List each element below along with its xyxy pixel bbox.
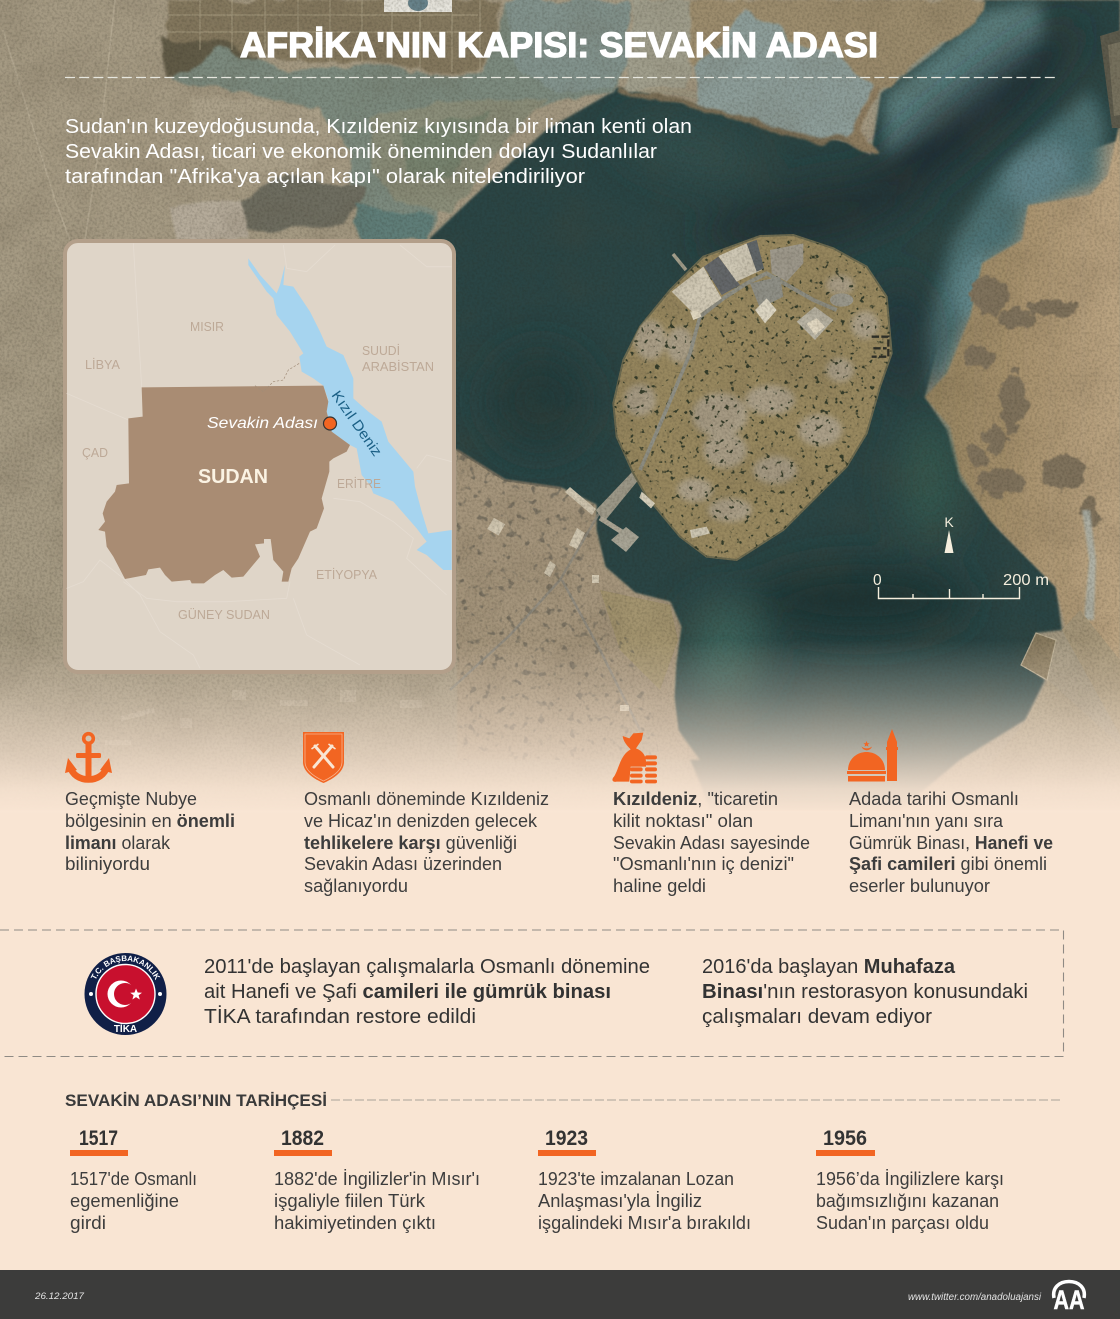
left land tracks (3, 0, 115, 240)
timeline item 1882: işgaliyle fiilen Türk (274, 1191, 426, 1211)
text: restoration right (702, 956, 1028, 1028)
timeline item 1923: 1923'te imzalanan Lozan (538, 1169, 734, 1189)
fade into cream background (0, 640, 1120, 815)
icon: money bag and coins (612, 733, 657, 783)
timeline item 1923: 1923 (545, 1127, 588, 1150)
map labels: SUUDİ (362, 344, 400, 358)
small island in lagoon (371, 97, 546, 213)
pale flats (170, 200, 250, 240)
salt ponds (384, 0, 452, 12)
icon: anchor (65, 734, 112, 780)
shoreline salt flat (1082, 510, 1096, 620)
timeline item 1923 (538, 1127, 751, 1233)
intro text: tarafından "Afrika'ya açılan kapı" olarak nitelendiriliyor (65, 165, 585, 188)
text: column 4: Gümrük Binası, Hanefi ve (849, 833, 1053, 853)
text: column 3: Kızıldeniz, "ticaretin (613, 789, 778, 809)
timeline item 1923: Anlaşması'yla İngiliz (538, 1191, 702, 1211)
map labels (82, 320, 434, 622)
text: column 1 (65, 789, 235, 874)
timeline item 1517: egemenliğine (70, 1191, 179, 1211)
timeline item 1517: girdi (70, 1213, 106, 1233)
intro text: Sudan'ın kuzeydoğusunda, Kızıldeniz kıyısında bir liman kenti olan (65, 115, 692, 138)
text: restoration left: 2011'de başlayan çalışmalarla Osmanlı dönemine (204, 956, 650, 978)
text: restoration left (204, 956, 650, 1028)
timeline item 1956: Sudan'ın parçası oldu (816, 1213, 989, 1233)
text: restoration right: çalışmaları devam ediyor (702, 1006, 932, 1028)
east coast land (925, 122, 1120, 670)
spit (846, 88, 881, 157)
text: column 2: sağlanıyordu (304, 876, 408, 896)
text: column 2: tehlikelere karşı güvenliği (304, 833, 517, 853)
location marker (324, 417, 336, 430)
intro text (65, 115, 692, 188)
map labels: LİBYA (85, 358, 121, 372)
Sudan (98, 386, 350, 583)
northeast structure (1100, 30, 1120, 128)
east land dark patches (967, 275, 1098, 524)
Red Sea label: Kızıl Deniz (328, 388, 384, 460)
island buildings and roads (639, 240, 888, 538)
date: 26.12.2017 (34, 1291, 85, 1302)
text: column 2: Osmanlı döneminde Kızıldeniz (304, 789, 549, 809)
text: column 1: Geçmişte Nubye (65, 789, 197, 809)
deep water (430, 0, 1120, 810)
text: column 2: Sevakin Adası üzerinden (304, 854, 502, 874)
intro text: Sevakin Adası, ticari ve ekonomik öneminden dolayı Sudanlılar (65, 140, 657, 163)
timeline item 1882: hakimiyetinden çıktı (274, 1213, 436, 1233)
salt pans and reeds (168, 0, 500, 73)
text: column 1: bölgesinin en önemli (65, 811, 235, 831)
icon: TİKA logo: TİKA (114, 1022, 137, 1035)
land mottling (0, 0, 1120, 810)
text: restoration right: Binası'nın restorasyon konusundaki (702, 981, 1028, 1003)
shadow triangle (221, 173, 368, 232)
salt pan grid (168, 0, 480, 72)
icon: TİKA logo: T.C. BAŞBAKANLIK (90, 956, 160, 980)
map labels: ÇAD (82, 446, 108, 460)
text: column 1: biliniyordu (65, 854, 150, 874)
text: column 3: Sevakin Adası sayesinde (613, 833, 810, 853)
timeline item 1882: 1882'de İngilizler'in Mısır'ı (274, 1169, 480, 1189)
central lagoon (689, 10, 874, 140)
text: column 3 (613, 789, 810, 896)
text: column 3: "Osmanlı'nın iç denizi" (613, 854, 794, 874)
Sudan label: SUDAN (198, 466, 268, 488)
title underline dashes (65, 76, 1056, 78)
Egypt border dashes (255, 363, 299, 392)
map labels: MISIR (190, 320, 224, 334)
texture (0, 0, 1120, 810)
text: column 2: ve Hicaz'ın denizden gelecek (304, 811, 538, 831)
north land (689, 0, 985, 92)
icon: mosque (847, 729, 898, 782)
timeline item 1517 (70, 1127, 197, 1233)
scale bar: 200 m (1003, 572, 1049, 589)
jetty (673, 254, 686, 270)
land forms with rough coasts (162, 0, 985, 240)
icon: TİKA logo (84, 953, 166, 1035)
text: column 4 (849, 789, 1053, 896)
text: restoration left: ait Hanefi ve Şafi camileri ile gümrük binası (204, 981, 611, 1003)
footer bar (0, 1270, 1120, 1319)
text: restoration left: TİKA tarafından restore edildi (204, 1005, 476, 1028)
text: column 4: Şafi camileri gibi önemli (849, 854, 1047, 874)
map labels: GÜNEY SUDAN (178, 608, 270, 622)
pier and causeway (596, 472, 640, 552)
Sevakin island (610, 230, 900, 565)
map borders (67, 243, 452, 668)
southeast land and breakwater (955, 610, 1120, 810)
timeline item 1956 (816, 1127, 1004, 1233)
text: column 3: kilit noktası" olan (613, 811, 753, 831)
Red Sea (248, 258, 452, 570)
text: column 4: Limanı'nın yanı sıra (849, 811, 1004, 831)
tan land (190, 95, 340, 170)
text: column 2 (304, 789, 549, 896)
satellite image of Sevakin (0, 0, 1120, 810)
timeline heading: SEVAKİN ADASI’NIN TARİHÇESİ (65, 1091, 327, 1110)
icon: shield with swords (303, 732, 344, 783)
timeline item 1517: 1517'de Osmanlı (70, 1169, 197, 1189)
water shading (490, 0, 1105, 700)
text: column 4: eserler bulunuyor (849, 876, 990, 896)
dashed frame (0, 930, 1064, 1056)
text: column 4: Adada tarihi Osmanlı (849, 789, 1019, 809)
north arrow: K (944, 514, 954, 530)
timeline item 1882: 1882 (281, 1127, 324, 1150)
panel: locator map (65, 241, 454, 672)
timeline item 1956: 1956 (823, 1127, 867, 1150)
left town remnants (105, 690, 422, 745)
coastline detail (457, 450, 561, 488)
timeline item 1882 (274, 1127, 480, 1233)
north arrow (944, 514, 954, 553)
text: column 3: haline geldi (613, 876, 706, 896)
map labels: ETİYOPYA (316, 568, 378, 582)
timeline item 1956: 1956’da İngilizlere karşı (816, 1169, 1004, 1189)
map labels: ARABİSTAN (362, 360, 434, 374)
timeline item 1517: 1517 (79, 1127, 118, 1150)
west land and town (440, 450, 700, 760)
Sevakin label: Sevakin Adası (207, 415, 318, 432)
social link: www.twitter.com/anadoluajansi (908, 1292, 1042, 1303)
text: restoration right: 2016'da başlayan Muhafaza (702, 956, 956, 978)
map labels: ERİTRE (337, 477, 381, 491)
scale bar (873, 572, 1049, 598)
upper-left lagoon (172, 0, 628, 238)
text: column 1: limanı olarak (65, 833, 171, 853)
scale bar: 0 (873, 572, 882, 589)
timeline item 1923: işgalindeki Mısır'a bırakıldı (538, 1213, 751, 1233)
Anadolu Agency logo: AA (1054, 1285, 1084, 1315)
title: AFRİKA'NIN KAPISI: SEVAKİN ADASI (240, 25, 878, 65)
timeline item 1956: bağımsızlığını kazanan (816, 1191, 999, 1211)
middle strip (625, 0, 692, 90)
